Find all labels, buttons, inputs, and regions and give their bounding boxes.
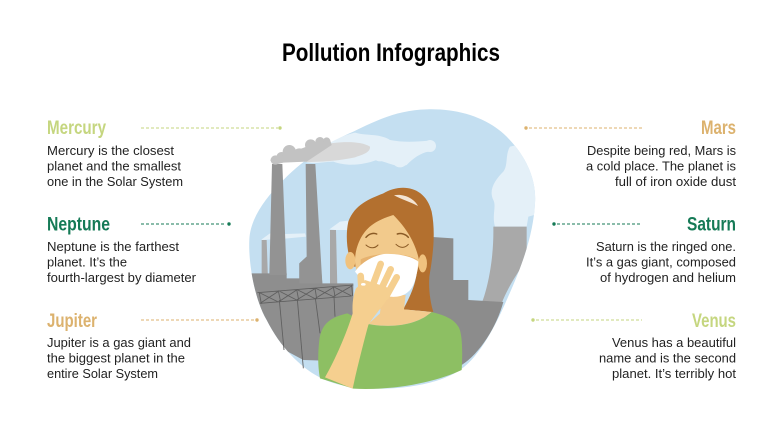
panel: Mars [524, 118, 737, 189]
cooling tower [482, 227, 527, 303]
panel: Mercury: Mercury [47, 118, 106, 139]
eyes and brows [366, 233, 408, 248]
factory scene [250, 140, 540, 365]
steam right [492, 146, 535, 226]
panel: Saturn [552, 214, 736, 285]
grey smoke puffs [270, 137, 332, 165]
panel: Jupiter: Jupiter [47, 311, 97, 332]
small chimneys [262, 230, 338, 284]
fence [257, 285, 353, 368]
ears [345, 252, 355, 269]
panel: Jupiter: the biggest planet in the [47, 352, 185, 366]
illustration: woman with mask in front of factory [249, 109, 540, 389]
panel: Jupiter [47, 311, 259, 381]
hair shine [394, 195, 418, 206]
buildings right [427, 237, 503, 365]
panel: Mars: full of iron oxide dust [615, 175, 737, 189]
chimneys [269, 164, 322, 283]
panel: Venus [531, 311, 737, 381]
panel: Mercury [47, 118, 282, 189]
panel: Saturn: Saturn [687, 214, 736, 236]
hair back [347, 188, 434, 312]
face shadow [361, 254, 417, 265]
shirt [318, 312, 462, 389]
background blob sky [249, 109, 535, 389]
panel: Neptune [47, 214, 231, 285]
panel: Neptune: fourth-largest by diameter [47, 271, 196, 285]
panel: Jupiter: Jupiter is a gas giant and [47, 336, 191, 350]
hand and arm [325, 264, 397, 389]
panel: Mercury: planet and the smallest [47, 160, 182, 174]
mask [355, 254, 418, 297]
panel: Neptune: planet. It’s the [47, 256, 127, 270]
panel: Saturn: of hydrogen and helium [600, 271, 736, 285]
panel: Mars: Despite being red, Mars is [587, 144, 736, 158]
panel: Neptune: Neptune is the farthest [47, 240, 180, 254]
buildings left [250, 257, 353, 362]
panel: Venus: Venus has a beautiful [612, 336, 736, 350]
small cloud puffs [262, 221, 348, 240]
light grey smoke [305, 142, 370, 162]
panel: Mercury: Mercury is the closest [47, 144, 175, 158]
panel: Saturn: It’s a gas giant, composed [586, 256, 736, 270]
fingernail [361, 283, 366, 286]
panel: Venus: Venus [692, 311, 736, 332]
panel: Mercury: one in the Solar System [47, 175, 183, 189]
panel: Venus: name and is the second [599, 352, 736, 366]
neck [368, 295, 432, 326]
panel: Jupiter: entire Solar System [47, 367, 158, 381]
panel: Saturn: Saturn is the ringed one. [596, 240, 736, 254]
face [355, 215, 419, 298]
title: Pollution Infographics [282, 39, 500, 67]
panel: Mars: a cold place. The planet is [586, 160, 736, 174]
cloud from chimneys [305, 133, 436, 167]
panel: Neptune: Neptune [47, 214, 110, 236]
panel: Mars: Mars [701, 118, 736, 139]
panel: Venus: planet. It’s terribly hot [612, 367, 737, 381]
